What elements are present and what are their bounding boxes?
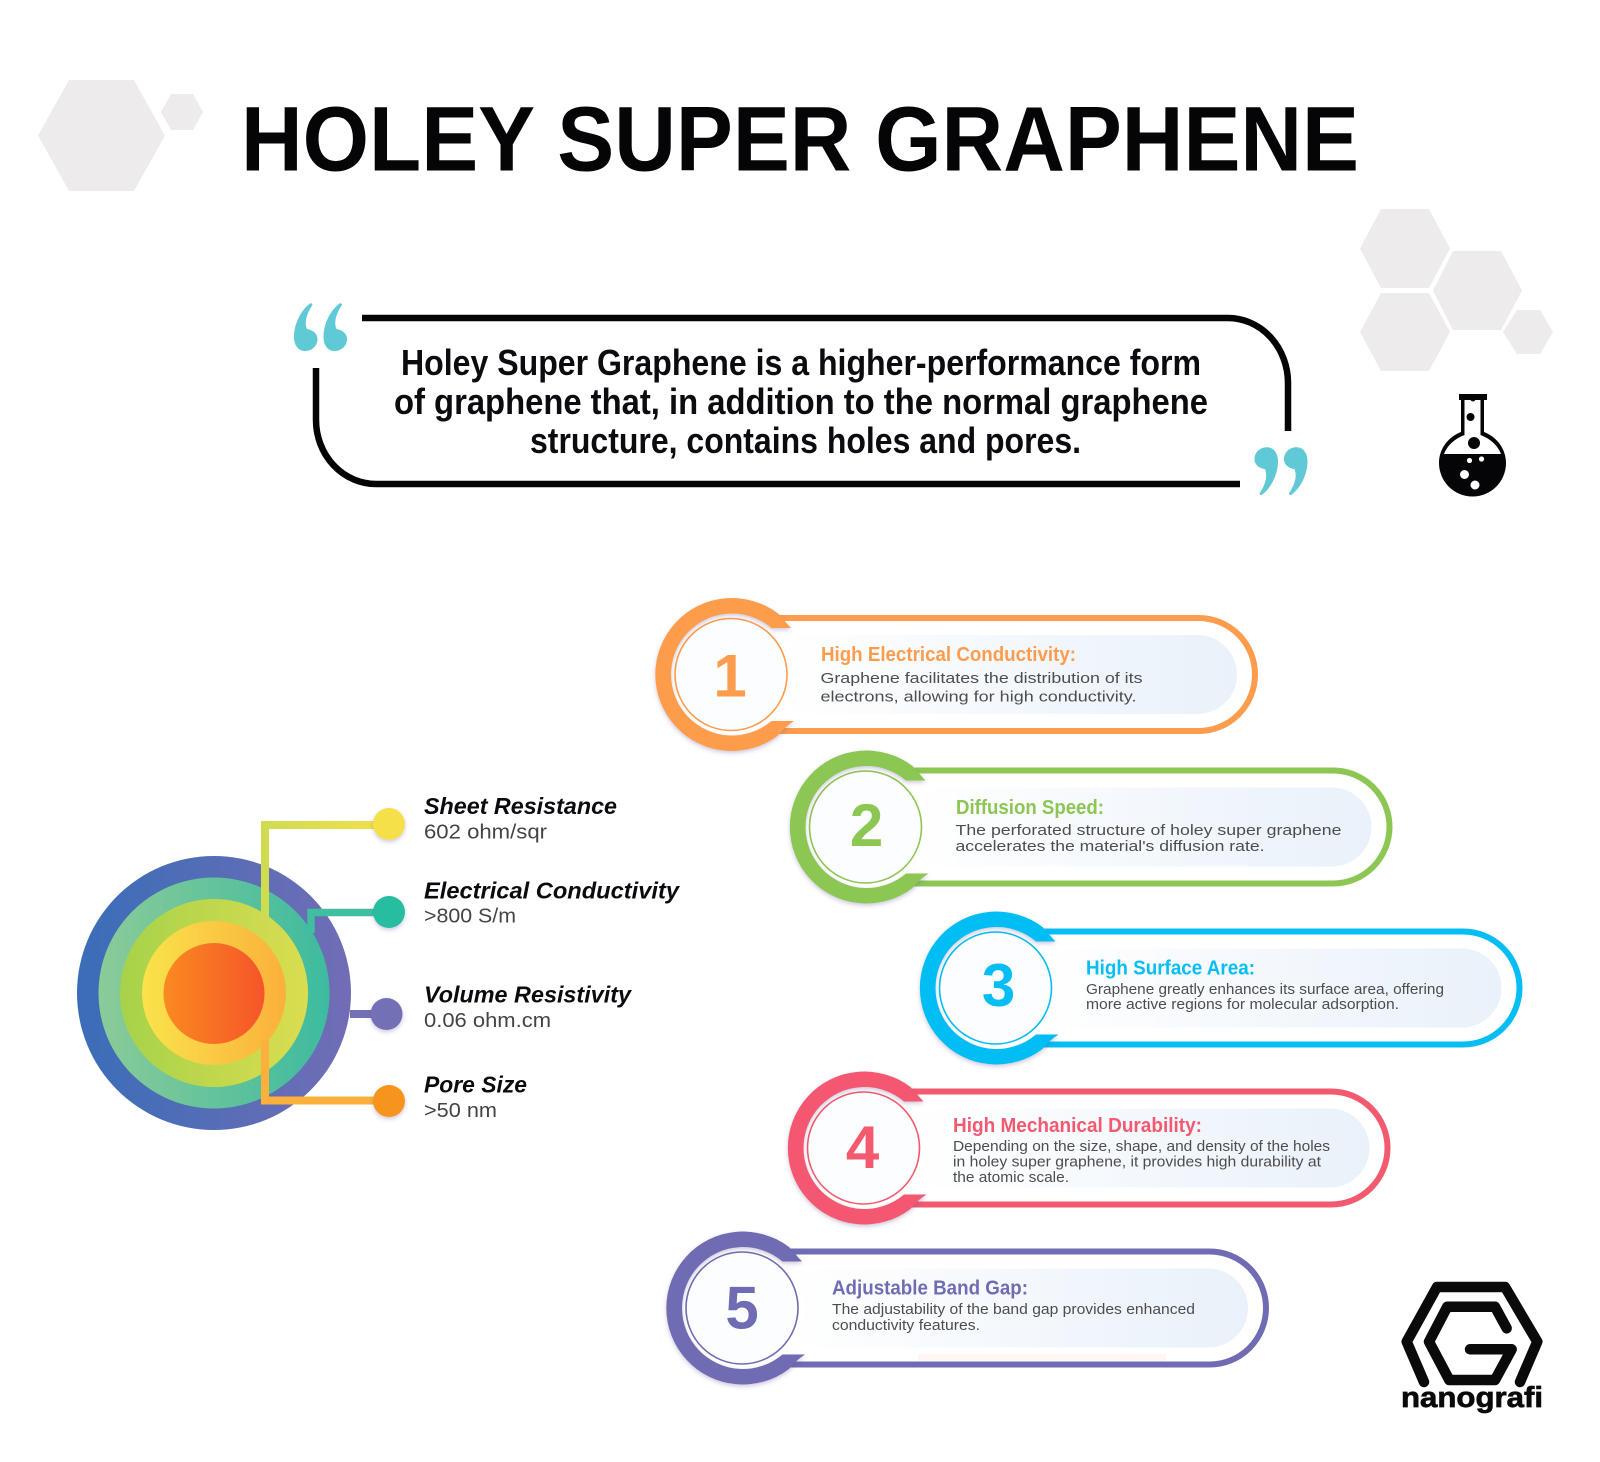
card 3 text: High Surface Area: (1086, 958, 1255, 980)
card 1 pill (772, 618, 1255, 731)
card 4: high mechanical durability (788, 1072, 1388, 1224)
quote text: of graphene that, in addition to the normal graphene (394, 381, 1208, 422)
card 3 pill (1036, 932, 1520, 1044)
card 2 text: accelerates the material's diffusion rate. (956, 838, 1264, 855)
card 4 number badge (788, 1072, 926, 1224)
title: HOLEY SUPER GRAPHENE (241, 88, 1359, 190)
logo mark (1407, 1287, 1537, 1382)
card 1 number badge: 1 (713, 642, 747, 710)
label: electrical conductivity: >800 S/m (424, 906, 516, 928)
label: sheet resistance: Sheet Resistance (424, 793, 617, 819)
quote frame (316, 318, 1288, 484)
card 4 text: in holey super graphene, it provides high durability at (953, 1154, 1322, 1170)
card 1 text: electrons, allowing for high conductivity. (820, 688, 1136, 706)
decorative hexagons: top right (1360, 209, 1553, 371)
logo: nanografi (1401, 1287, 1543, 1414)
label: sheet resistance (424, 793, 617, 844)
card 2 text: Diffusion Speed: (956, 797, 1104, 819)
label: volume resistivity (424, 982, 632, 1032)
card 3 number badge: 3 (982, 952, 1015, 1019)
card 5: adjustable band gap (666, 1232, 1266, 1384)
card 1: high electrical conductivity (655, 598, 1255, 751)
label: sheet resistance: 602 ohm/sqr (424, 822, 547, 844)
card 5 number badge: 5 (725, 1274, 759, 1342)
card 4 text: the atomic scale. (953, 1169, 1069, 1186)
icon: flask (1439, 394, 1506, 496)
card 2: diffusion speed (790, 750, 1390, 904)
concentric circle chart (77, 808, 405, 1130)
card 2 pill (906, 770, 1390, 884)
card 5 number badge (666, 1232, 805, 1384)
connector: volume resistivity (350, 998, 402, 1030)
card 5 text (832, 1278, 1195, 1334)
label: pore size (424, 1072, 527, 1122)
quote text (394, 342, 1208, 461)
connector: sheet resistance (265, 808, 405, 917)
label: electrical conductivity: Electrical Conductivity (424, 878, 680, 904)
chart rings (77, 856, 351, 1130)
quote panel (294, 303, 1308, 495)
card 3 text: more active regions for molecular adsorption. (1086, 996, 1399, 1013)
card 3: high surface area (920, 912, 1520, 1064)
card 1 text (820, 644, 1142, 706)
connector: electrical conductivity (311, 896, 405, 933)
card 2 text: The perforated structure of holey super graphene (956, 822, 1342, 839)
closing quote mark (1254, 447, 1308, 495)
card 5 text: conductivity features. (832, 1317, 980, 1334)
card 4 text (953, 1115, 1330, 1186)
card 1 text: Graphene facilitates the distribution of its (820, 670, 1142, 687)
label: pore size: Pore Size (424, 1072, 527, 1098)
card 5 text: The adjustability of the band gap provides enhanced (832, 1301, 1195, 1318)
card 1 number badge (655, 598, 794, 751)
card 4 number badge: 4 (846, 1114, 880, 1181)
quote text: structure, contains holes and pores. (530, 420, 1081, 461)
card 3 text: Graphene greatly enhances its surface area, offering (1086, 981, 1444, 998)
quote text: Holey Super Graphene is a higher-performance form (401, 342, 1201, 383)
label: volume resistivity: 0.06 ohm.cm (424, 1010, 551, 1032)
card 3 number badge (920, 912, 1058, 1064)
label: pore size: >50 nm (424, 1100, 497, 1122)
card 2 text (956, 797, 1342, 855)
logo wordmark: nanografi (1401, 1382, 1543, 1414)
card 2 number badge: 2 (850, 792, 883, 859)
card 5 text: Adjustable Band Gap: (832, 1278, 1028, 1300)
card 2 number badge (790, 750, 928, 904)
label: volume resistivity: Volume Resistivity (424, 982, 632, 1008)
card 3 text (1086, 958, 1444, 1013)
card 1 text: High Electrical Conductivity: (821, 644, 1076, 666)
card 4 pill (904, 1092, 1388, 1204)
card 5 pill (783, 1252, 1266, 1364)
label: electrical conductivity (424, 878, 680, 928)
opening quote mark (294, 303, 347, 351)
card 4 text: High Mechanical Durability: (953, 1115, 1202, 1137)
card 4 text: Depending on the size, shape, and density of the holes (953, 1138, 1330, 1155)
connector: pore size (265, 1040, 405, 1117)
decorative hexagons: top left (38, 80, 203, 191)
